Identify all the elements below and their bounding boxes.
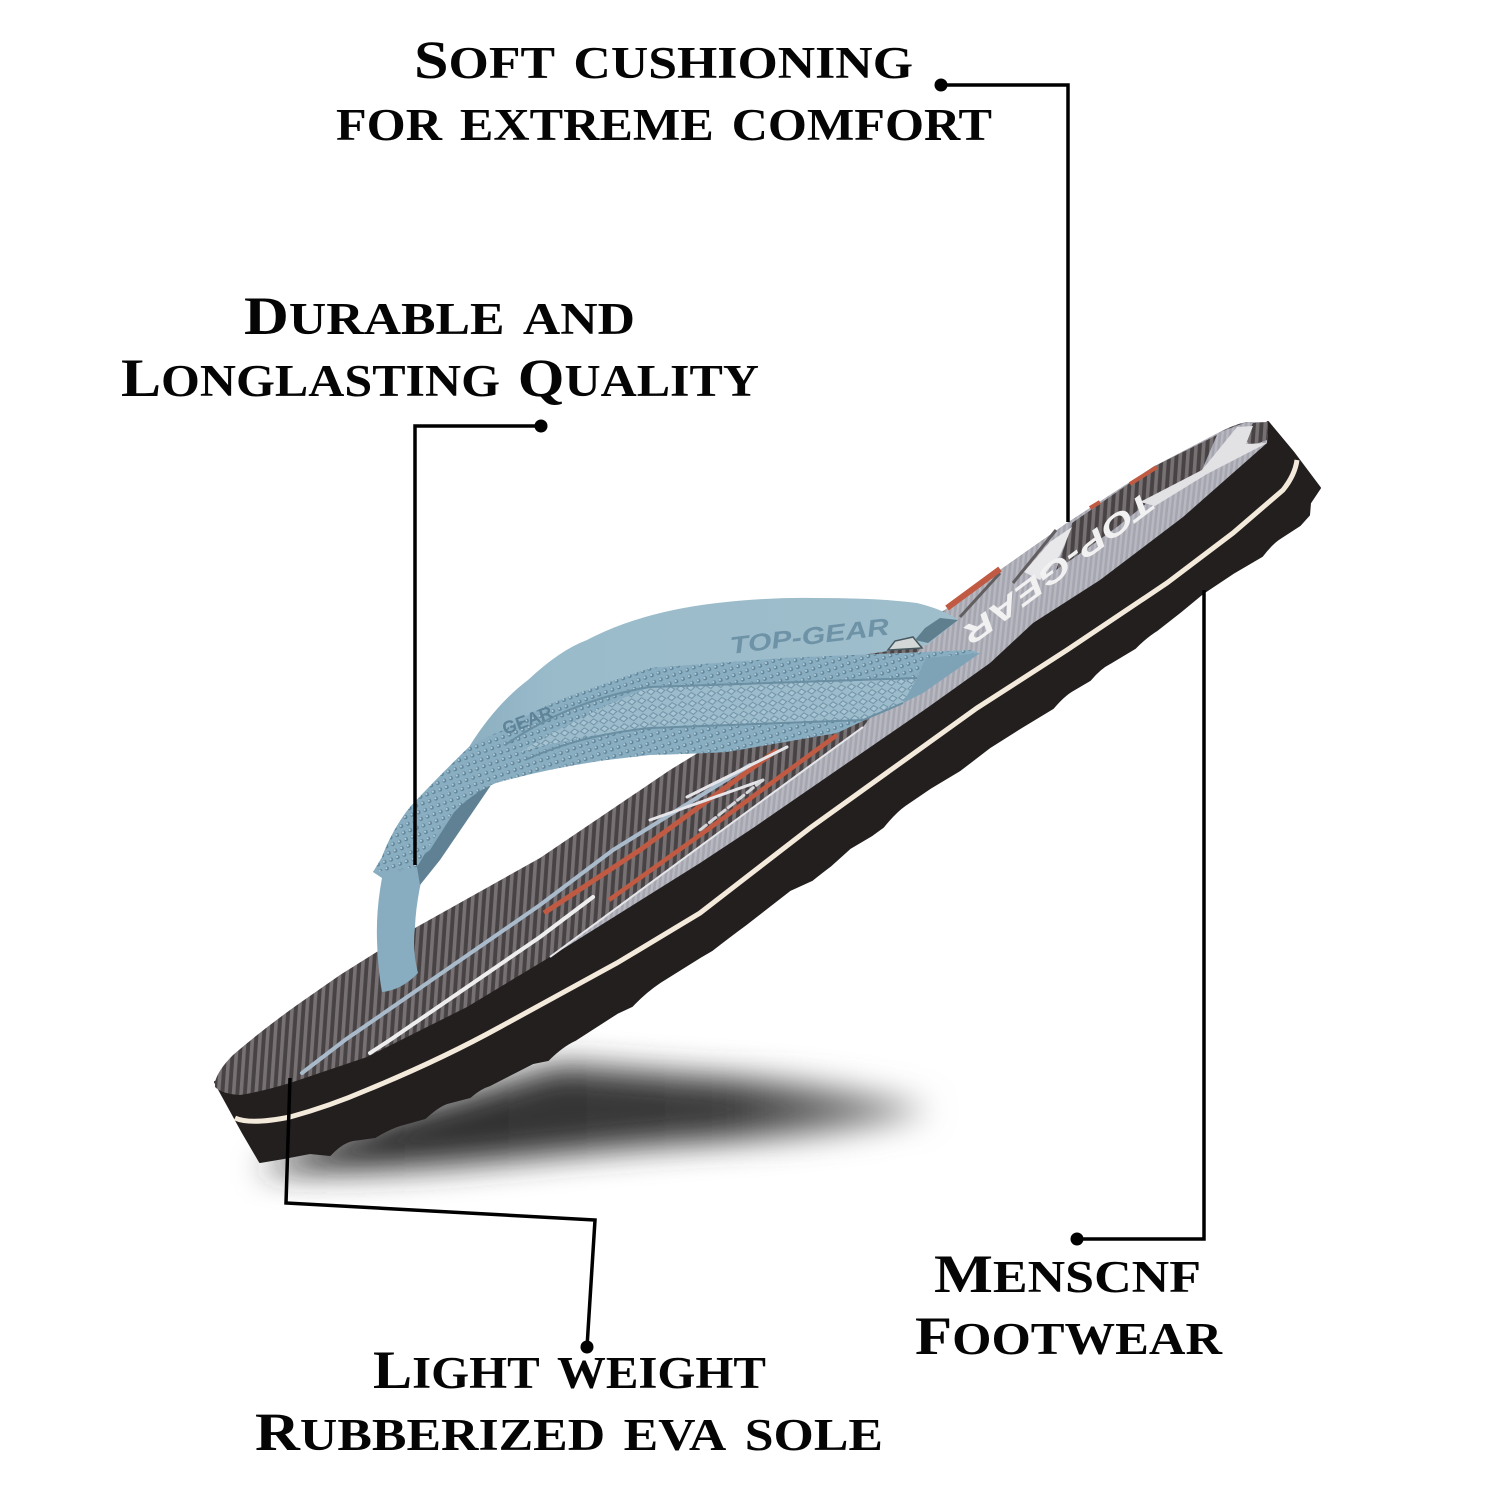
strap embossed brand small: GEAR — [500, 702, 555, 739]
leader: brand — [1070, 590, 1204, 1246]
strap embossed brand: TOP-GEAR — [728, 614, 891, 660]
ground shadow — [262, 1065, 930, 1171]
strap inner shade — [417, 772, 500, 885]
footbed white edge line — [550, 727, 863, 957]
leader: durable — [415, 420, 548, 865]
callout text: durable: Durable and — [244, 277, 635, 348]
footbed dark print patch — [1056, 435, 1217, 570]
callout text: light weight sole: Rubberized eva sole — [255, 1393, 883, 1464]
footbed brand print: TOP-GEAR — [956, 485, 1162, 651]
strap tip ridge — [903, 653, 980, 703]
callout text: brand — [915, 1235, 1223, 1368]
footbed dark thin lines — [960, 530, 1056, 617]
footbed pale lines — [302, 747, 787, 1073]
footbed white band print — [1024, 527, 1072, 580]
footbed red accents — [544, 467, 1157, 913]
strap buckle — [888, 637, 922, 650]
callout text: light weight sole: Light weight — [373, 1331, 766, 1402]
strap centre ridge — [520, 678, 917, 752]
white midsole stripe — [235, 460, 1297, 1121]
callout text: soft cushioning — [336, 21, 992, 154]
leader: soft cushioning — [934, 78, 1068, 522]
strap back band — [382, 598, 958, 872]
footbed top surface — [215, 422, 1268, 1095]
flip-flop product illustration — [215, 422, 1320, 1162]
footbed dark toe corner — [1245, 422, 1268, 446]
strap post — [373, 865, 425, 992]
strap front textured band — [373, 650, 980, 872]
strap buckle shadow — [915, 618, 958, 643]
callout text: brand: Menscnf — [934, 1235, 1201, 1306]
callout text: durable — [121, 277, 759, 410]
callout text: brand: Footwear — [915, 1297, 1223, 1368]
leader: sole — [286, 1078, 595, 1354]
footbed light grey band — [550, 422, 1268, 957]
callout text: soft cushioning: Soft cushioning — [414, 21, 913, 92]
callout text: soft cushioning: for extreme comfort — [336, 83, 992, 154]
sole side — [215, 422, 1320, 1162]
footbed white slash print — [1140, 426, 1267, 506]
strap ridge lines — [505, 678, 917, 760]
callout text: light weight sole — [255, 1331, 883, 1464]
callout text: durable: Longlasting Quality — [121, 339, 759, 410]
